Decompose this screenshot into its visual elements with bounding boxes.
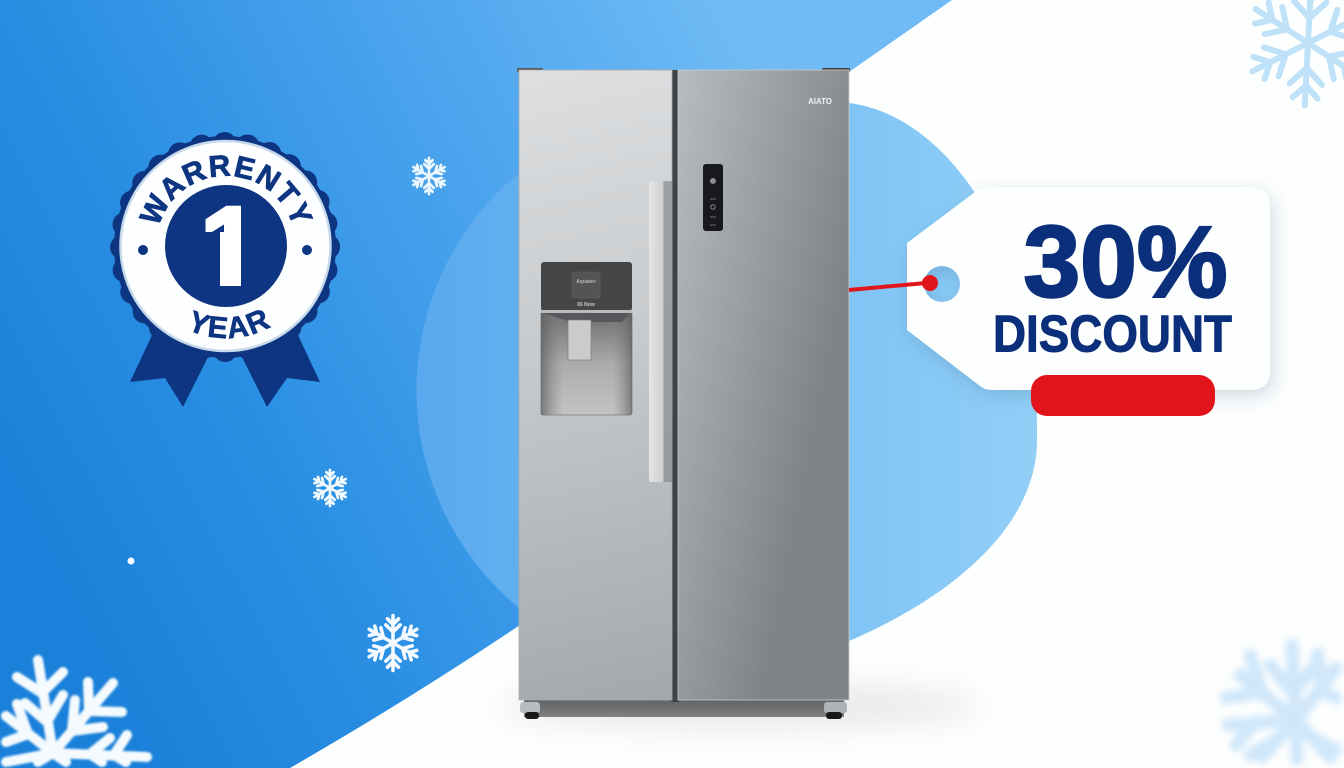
badge: scalloped rim xyxy=(114,136,336,358)
dispenser: cavity side shading xyxy=(541,312,632,415)
fridge: right hinge xyxy=(822,68,850,72)
tag: string xyxy=(849,283,926,290)
dispenser: screen label: Aquatec xyxy=(576,279,596,285)
snowflake: small near top xyxy=(411,158,447,194)
badge: YEAR curved text: YEAR xyxy=(193,310,272,339)
dispenser: screen xyxy=(572,272,600,298)
snowflake: small middle xyxy=(312,470,348,506)
badge: WARRENTY curved text: WARRENTY xyxy=(138,155,314,223)
fridge: right door xyxy=(678,70,849,700)
tag: 30%: 30% xyxy=(1024,206,1228,318)
dispenser: top panel xyxy=(541,262,632,311)
decorative snow dot xyxy=(128,558,134,564)
tag: red bar xyxy=(1031,375,1215,416)
fridge: brand label: AIATO xyxy=(808,97,832,106)
shadow under refrigerator xyxy=(500,686,980,726)
fridge: water dispenser xyxy=(541,262,632,415)
fridge: door handle xyxy=(649,181,664,482)
badge: navy centre circle xyxy=(165,185,287,307)
fridge: right foot xyxy=(824,702,847,719)
snowflake: bottom left, large xyxy=(6,660,147,762)
refrigerator xyxy=(517,68,850,719)
background: light blue circle xyxy=(416,100,1037,660)
fridge: control panel xyxy=(703,164,723,231)
fridge: base plinth xyxy=(524,699,844,717)
tag: body xyxy=(907,187,1270,390)
badge: white disc xyxy=(120,141,330,351)
dispenser: spout xyxy=(568,320,591,360)
dispenser: panel label: 65 Now xyxy=(577,302,595,308)
dispenser: cavity xyxy=(541,312,632,415)
tag: DISCOUNT: DISCOUNT xyxy=(993,306,1232,364)
badge: number 1: 1 xyxy=(200,184,262,309)
fridge: centre gap xyxy=(671,70,679,702)
fridge: left foot xyxy=(520,702,540,719)
dispenser: sill xyxy=(541,310,632,313)
warranty badge xyxy=(110,132,340,407)
dispenser: upper shade xyxy=(543,313,630,322)
badge: right dot xyxy=(302,245,312,255)
background: white diagonal area xyxy=(290,0,1344,768)
snowflake: lower medium xyxy=(366,616,420,670)
price tag xyxy=(849,187,1270,416)
snowflake: top right xyxy=(1249,0,1344,108)
fridge: left door xyxy=(519,70,672,700)
fridge: left hinge xyxy=(517,68,543,72)
badge: stem backing for number 1 xyxy=(220,232,241,285)
snowflake: bottom right, blurred xyxy=(1226,645,1336,759)
fridge: handle shadow xyxy=(660,181,672,482)
badge: ribbon tails xyxy=(130,333,320,407)
badge: left dot xyxy=(138,245,148,255)
tag: string knot xyxy=(922,275,938,291)
